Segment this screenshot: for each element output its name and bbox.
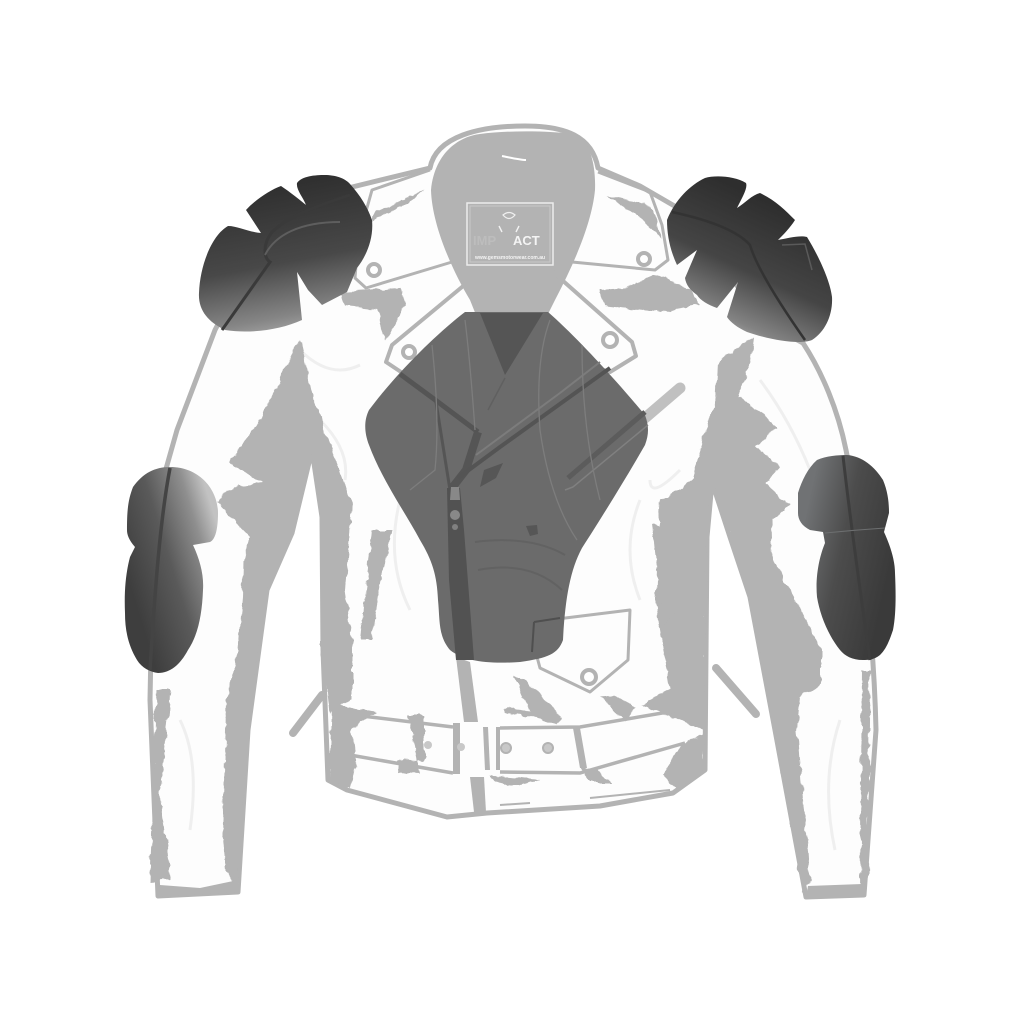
- label tag: IMP: [473, 233, 496, 248]
- side lace left: [293, 695, 322, 733]
- zip left strand: [436, 402, 450, 490]
- lower front shading: [503, 675, 634, 724]
- chest pocket zip: [645, 388, 680, 418]
- right elbow seam: [825, 528, 885, 533]
- left elbow spine: [150, 468, 170, 670]
- shoulder strap left: [372, 190, 425, 222]
- zipper seam: [476, 362, 600, 455]
- armour: right shoulder pad: [667, 176, 832, 342]
- left elbow shape: [125, 467, 218, 673]
- armour: chest and back protector: [365, 312, 648, 663]
- jacket: [150, 126, 876, 897]
- pad lower folds: [475, 540, 565, 590]
- armour: left elbow pad: [125, 467, 218, 673]
- pad contour left: [410, 320, 475, 490]
- shoulder seam patch left: [340, 288, 404, 340]
- right elbow spine: [843, 456, 870, 660]
- left pad strap: [222, 195, 350, 330]
- snap left collar: [368, 264, 380, 276]
- front zip band: [447, 488, 474, 660]
- jacket silhouette: [150, 126, 876, 897]
- lower pocket edge on pad: [532, 618, 560, 652]
- left lapel seam: [400, 374, 478, 432]
- neckline V: [480, 313, 543, 375]
- pocket zip on pad: [568, 412, 645, 478]
- left pad inner ridge: [265, 222, 340, 255]
- left sleeve and armpit shading: [217, 340, 352, 892]
- side lace right: [716, 668, 756, 714]
- left lapel: [386, 282, 468, 378]
- right pad strap: [672, 212, 805, 340]
- snap right lapel: [603, 333, 617, 347]
- right sleeve outer stripe: [860, 670, 870, 890]
- diagonal zipper: [458, 368, 610, 478]
- right lapel: [553, 272, 636, 372]
- hem shading left: [330, 705, 376, 788]
- right sleeve and armpit shading: [640, 337, 822, 892]
- left sleeve outer stripe: [150, 690, 172, 882]
- left waist pocket: [360, 530, 392, 640]
- pad contour right: [539, 320, 600, 540]
- zip upper branch: [452, 432, 478, 488]
- body front placket: [456, 657, 478, 722]
- belt: [350, 710, 685, 786]
- pocket zip outline: [565, 425, 648, 490]
- collar edge: [488, 378, 505, 410]
- right waist pocket: [652, 525, 678, 625]
- shoulder seam patch right: [600, 275, 700, 312]
- shoulder strap right: [606, 195, 662, 240]
- right cuff: [806, 884, 864, 897]
- zip puller: [450, 487, 460, 530]
- pocket snap: [582, 670, 596, 684]
- left collar: [355, 170, 452, 288]
- right elbow shape: [798, 455, 896, 660]
- label tag: [467, 203, 553, 265]
- label tag: www.gemsmotorwear.com.au: [474, 255, 545, 261]
- left cuff: [158, 880, 238, 897]
- stain: [480, 463, 503, 487]
- label tag: ACT: [513, 233, 540, 248]
- right collar: [572, 172, 668, 270]
- wrinkles: [180, 350, 840, 850]
- hanger loop: [502, 156, 526, 160]
- small dark spot: [526, 525, 538, 536]
- snap left lapel: [403, 346, 415, 358]
- snap right collar: [638, 253, 650, 265]
- armour: left shoulder pad: [199, 175, 372, 332]
- hem placket: [470, 777, 486, 812]
- chest pad shape: [365, 312, 648, 663]
- left pad shape: [199, 175, 372, 332]
- armour: right elbow pad: [798, 455, 896, 660]
- lower pocket flap: [533, 610, 630, 692]
- hem shading right: [663, 735, 704, 788]
- hem seam: [500, 790, 670, 805]
- collar back: [431, 131, 595, 320]
- right pad ridge: [782, 244, 812, 270]
- right pad shape: [667, 176, 832, 342]
